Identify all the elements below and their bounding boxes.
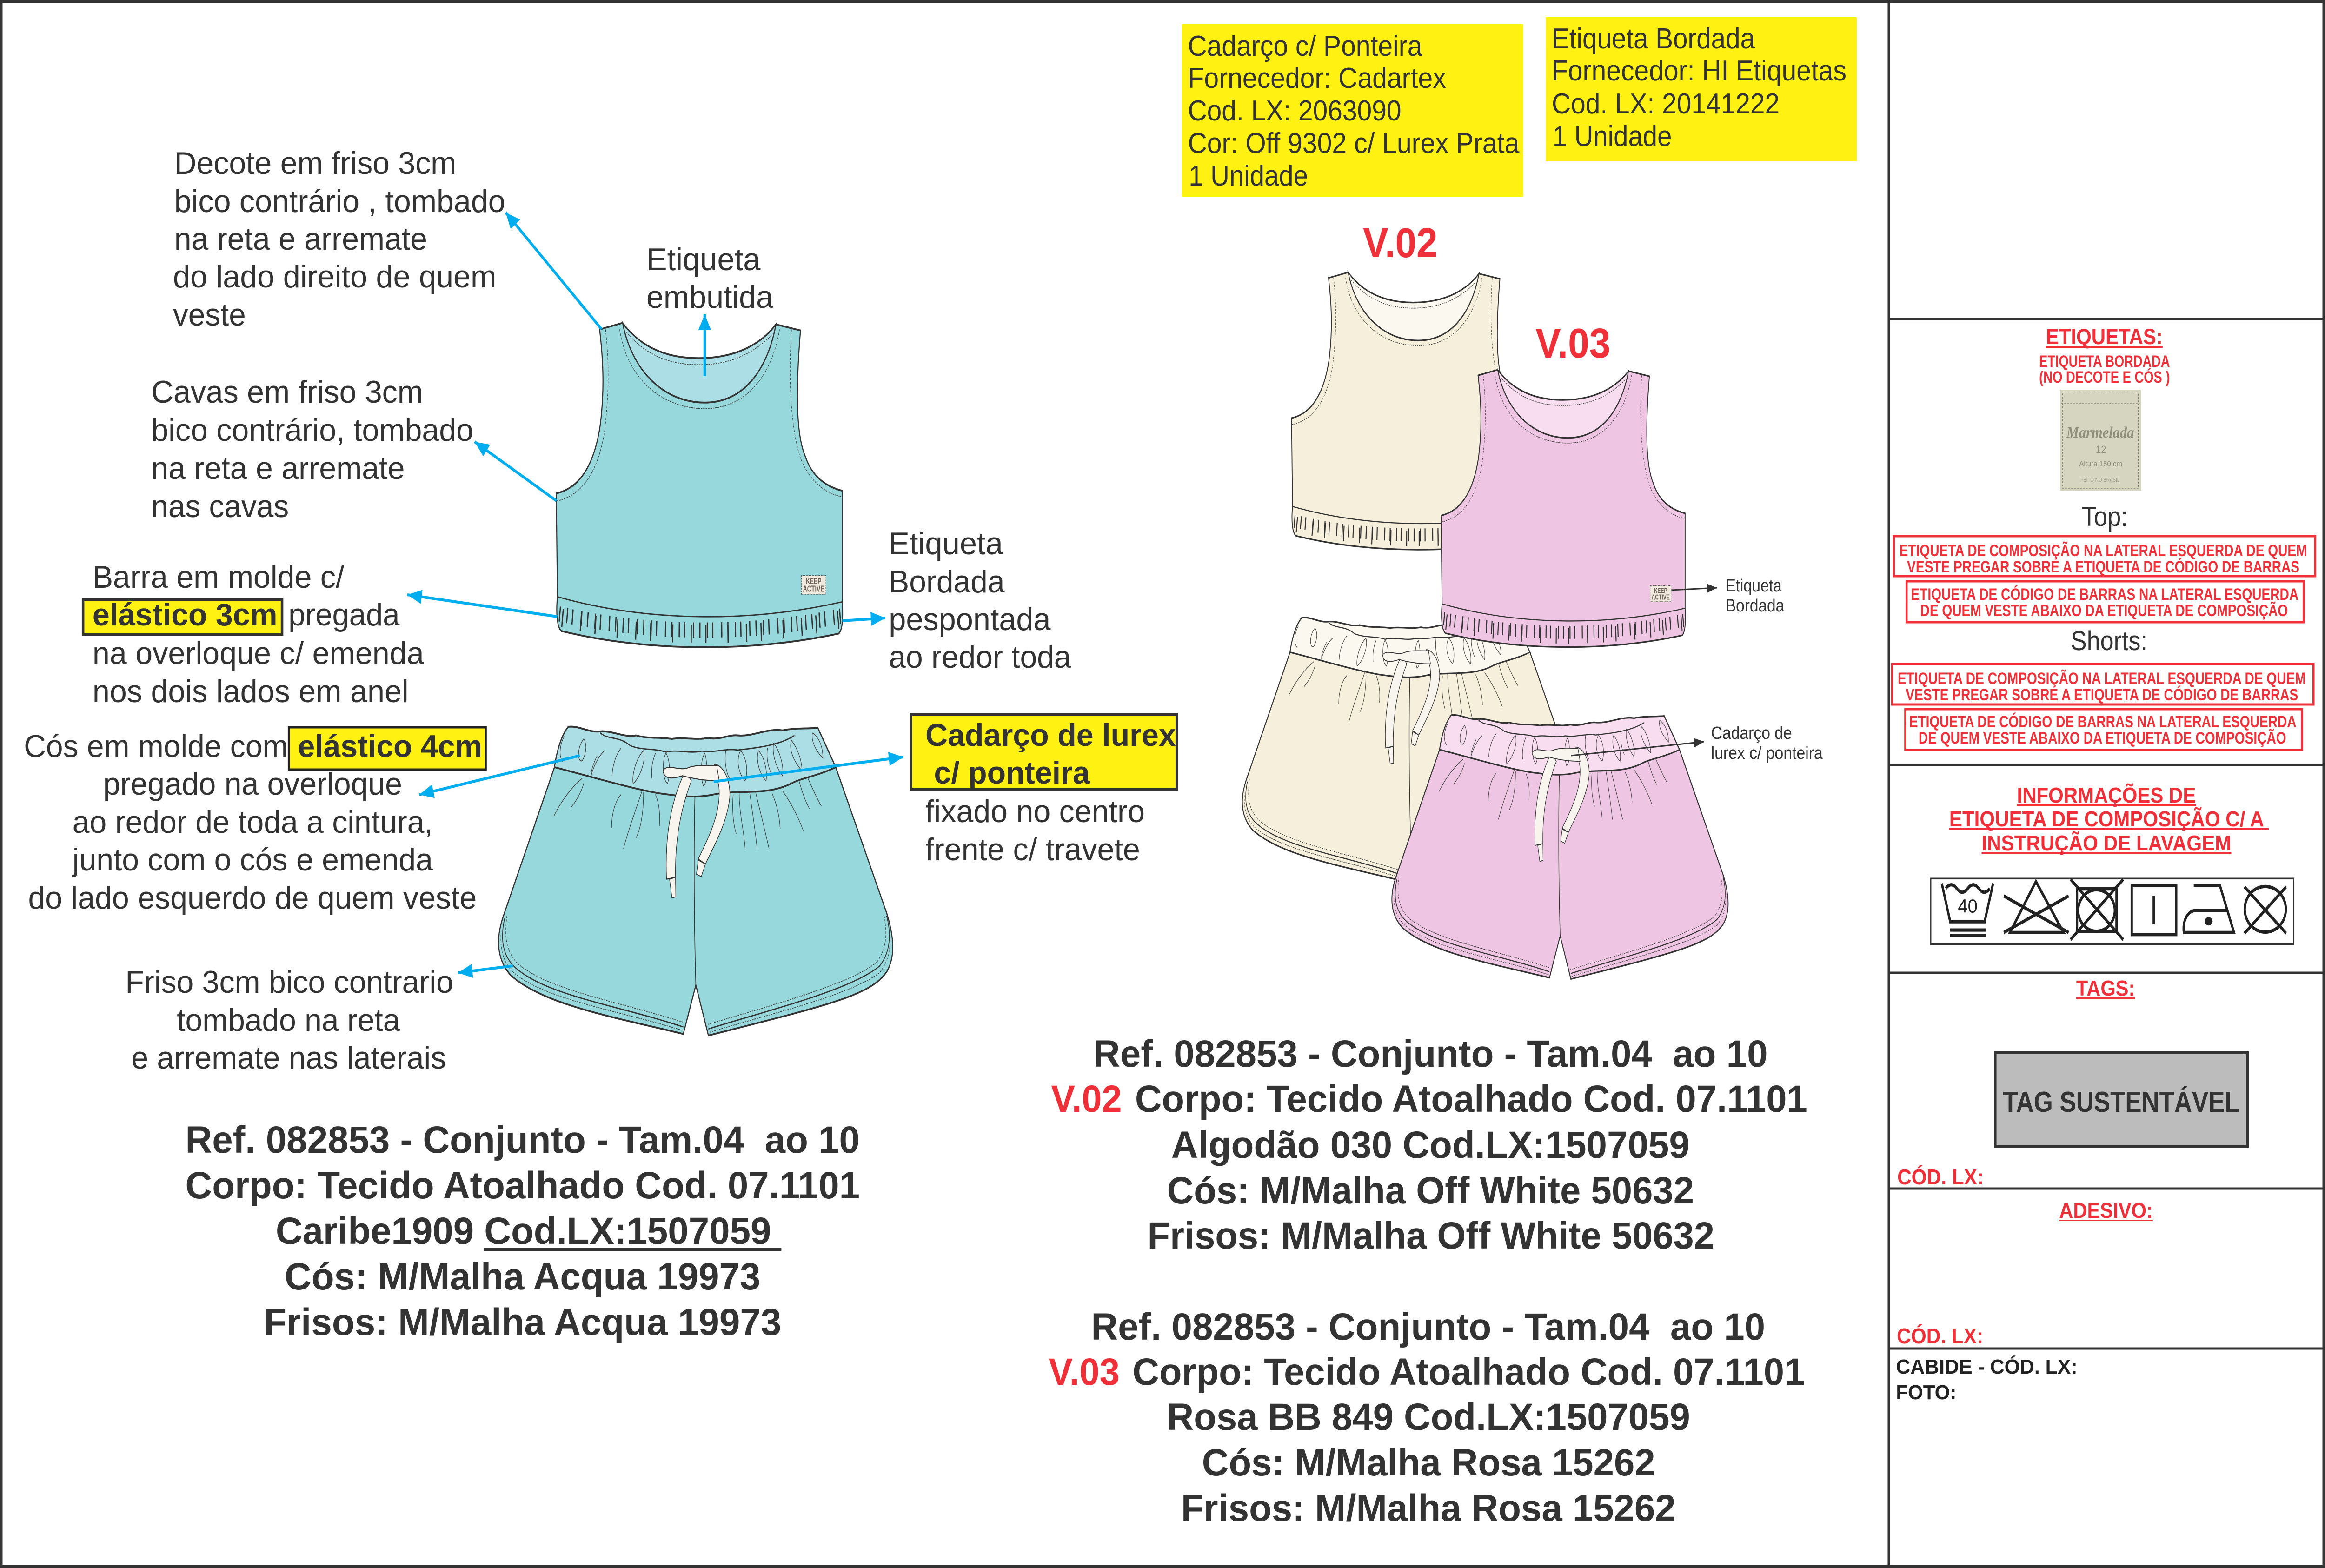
text: barra [83, 559, 424, 709]
text: cós: do lado esquerdo de quem veste [28, 880, 477, 916]
callout: cadarço supplier: 1 Unidade [1189, 159, 1308, 192]
heading: etiquetas: ETIQUETAS: [2046, 324, 2163, 349]
garment: teal top [556, 323, 843, 647]
text: friso [125, 964, 453, 1076]
text: cós: junto com o cós e emenda [72, 842, 433, 877]
text: etiqueta bordada: (NO DECOTE E CÓS ) [2039, 368, 2170, 386]
heading: V.02: V.02 [1363, 220, 1437, 266]
arrows: blue callout pointers [407, 213, 903, 973]
callout: etiqueta supplier: Fornecedor: HI Etiquetas [1552, 54, 1847, 87]
callout: cadarço supplier: Fornecedor: Cadartex [1188, 62, 1446, 94]
garment: pink top [1441, 370, 1685, 647]
panel: cabide e foto: CABIDE - CÓD. LX: [1896, 1355, 2078, 1378]
text block: main reference: Caribe1909 Cod.LX:1507059 [276, 1209, 771, 1252]
text: barra: na overloque c/ emenda [93, 635, 424, 671]
icon: Marmelada woven label: 12 [2096, 444, 2106, 455]
text: friso: tombado na reta [177, 1002, 400, 1038]
text block: V.03 reference: Ref. 082853 - Conjunto - Tam.04 ao 10 [1091, 1305, 1765, 1348]
garment: teal shorts [498, 727, 893, 1036]
text: cós: Cós em molde com [24, 728, 288, 764]
heading: informações: INFORMAÇÕES DE [2017, 783, 2196, 807]
garment: cream shorts [1242, 618, 1579, 882]
callout: etiqueta bordada pink [1671, 576, 1785, 615]
tag sustentável box [1995, 1053, 2247, 1146]
callout: etiqueta bordada pink: Bordada [1726, 596, 1785, 615]
callout: etiqueta supplier: 1 Unidade [1553, 120, 1672, 153]
text: etiqueta bordada pespontada: Bordada [889, 564, 1005, 599]
text: etiqueta bordada pespontada [889, 525, 1071, 675]
text: etiqueta bordada pespontada: ao redor toda [889, 639, 1071, 675]
text: cadarço de lurex: frente c/ travete [925, 831, 1140, 867]
callout: cadarço pink: lurex c/ ponteira [1711, 743, 1823, 763]
heading: shorts: Shorts: [2071, 626, 2147, 656]
text block: V.03 reference [1049, 1305, 1805, 1529]
heading: V.03: V.03 [1535, 320, 1610, 367]
text: etiqueta bordada pespontada: pespontada [889, 601, 1051, 637]
callout: etiqueta supplier [1546, 17, 1857, 161]
text: barra: nos dois lados em anel [93, 673, 409, 709]
text: decote [173, 145, 505, 332]
heading: top: Top: [2082, 502, 2128, 532]
callout: código de barras top [1906, 581, 2304, 622]
text block: V.03 reference: Frisos: M/Malha Rosa 15262 [1181, 1487, 1676, 1529]
text: barra: pregada [288, 597, 400, 632]
heading: informações: INSTRUÇÃO DE LAVAGEM [1981, 831, 2231, 855]
text: código adesivo: CÓD. LX: [1897, 1324, 1983, 1348]
text: cós [24, 727, 486, 916]
icon: Marmelada woven label: Marmelada [2066, 424, 2134, 441]
text: etiqueta embutida [646, 241, 774, 315]
text: friso: e arremate nas laterais [131, 1040, 446, 1076]
heading: tags: TAGS: [2076, 977, 2135, 1000]
panel: cabide e foto: FOTO: [1896, 1381, 1956, 1403]
panel: right-hand specification column [1889, 0, 2325, 1568]
icon: care symbols strip [1931, 878, 2294, 944]
text: cavas: bico contrário, tombado [151, 412, 473, 448]
callout: etiqueta supplier: Etiqueta Bordada [1552, 22, 1755, 55]
illustration: V.02 cream set [1242, 272, 1579, 882]
panel: adesivo [1897, 1199, 2153, 1348]
text: decote: Decote em friso 3cm [174, 145, 456, 181]
icon: Marmelada woven label: Altura 150 cm [2079, 459, 2122, 468]
text: decote: na reta e arremate [174, 221, 427, 257]
text block: V.02 reference: Algodão 030 Cod.LX:1507059 [1171, 1123, 1690, 1166]
callout: etiqueta bordada pink: Etiqueta [1726, 576, 1782, 595]
callout: cadarço supplier: Cadarço c/ Ponteira [1188, 30, 1422, 62]
text: cadarço de lurex: c/ ponteira [934, 755, 1090, 791]
heading: informações [1949, 783, 2269, 855]
callout: cadarço supplier [1182, 24, 1523, 197]
text: cós: pregado na overloque [103, 766, 402, 802]
text: cavas: na reta e arremate [151, 450, 405, 486]
text block: V.02 reference: V.02 [1051, 1077, 1122, 1120]
text block: V.03 reference: V.03 [1049, 1350, 1120, 1393]
text: código tag: CÓD. LX: [1897, 1165, 1984, 1189]
text: barra: Barra em molde c/ [93, 559, 345, 595]
icon: Marmelada woven label [2060, 390, 2141, 491]
text block: main reference: Frisos: M/Malha Acqua 19973 [264, 1301, 781, 1343]
text block: main reference [186, 1118, 860, 1343]
text: cós: ao redor de toda a cintura, [73, 804, 433, 840]
callout: cadarço pink: Cadarço de [1711, 723, 1792, 743]
garment: pink shorts [1392, 715, 1728, 979]
text: etiqueta bordada [2039, 353, 2170, 386]
text: friso: Friso 3cm bico contrario [125, 964, 453, 1000]
callout: composição top [1894, 536, 2315, 576]
illustration: V.03 pink set [1392, 370, 1728, 979]
text: etiqueta embutida: Etiqueta [646, 241, 761, 277]
garment: cream top [1291, 272, 1536, 550]
text: cós: elástico 4cm [298, 728, 482, 764]
callout: cadarço supplier: Cod. LX: 2063090 [1188, 94, 1402, 127]
text: decote: do lado direito de quem [173, 259, 496, 294]
text: cadarço de lurex [911, 714, 1177, 867]
text: cavas [151, 374, 473, 524]
text: etiqueta bordada pespontada: Etiqueta [889, 525, 1003, 561]
text: decote: bico contrário , tombado [174, 183, 505, 219]
text: decote: veste [173, 297, 246, 332]
text block: V.03 reference: Cós: M/Malha Rosa 15262 [1202, 1441, 1655, 1484]
text block: main reference: Ref. 082853 - Conjunto - Tam.04 ao 10 [186, 1118, 860, 1161]
panel: tags [1897, 977, 2247, 1189]
text block: V.03 reference: Corpo: Tecido Atoalhado Cod. 07.1101 [1132, 1350, 1805, 1393]
tag sustentável box: TAG SUSTENTÁVEL [2003, 1086, 2240, 1118]
text block: V.03 reference: Rosa BB 849 Cod.LX:1507059 [1167, 1395, 1690, 1438]
illustration: main teal set [498, 323, 893, 1036]
text block: main reference: Cós: M/Malha Acqua 19973 [285, 1255, 761, 1298]
text: cavas: Cavas em friso 3cm [151, 374, 423, 410]
text: etiqueta bordada: ETIQUETA BORDADA [2039, 353, 2170, 371]
panel: informações de lavagem [1931, 783, 2294, 944]
callout: cadarço supplier: Cor: Off 9302 c/ Lurex Prata [1188, 127, 1520, 159]
text: etiqueta embutida: embutida [646, 279, 774, 315]
text: cavas: nas cavas [151, 488, 289, 524]
text block: V.02 reference: Frisos: M/Malha Off White 50632 [1147, 1214, 1714, 1257]
callout: código de barras shorts [1905, 709, 2302, 750]
text block: main reference: Corpo: Tecido Atoalhado Cod. 07.1101 [186, 1164, 860, 1207]
text block: V.02 reference: Corpo: Tecido Atoalhado Cod. 07.1101 [1135, 1077, 1807, 1120]
icon: care symbols strip: 40 [1958, 896, 1978, 917]
panel: cabide e foto [1896, 1355, 2078, 1403]
callout: cadarço pink [1571, 723, 1823, 763]
text block: V.02 reference: Cós: M/Malha Off White 50632 [1167, 1169, 1694, 1212]
text: cadarço de lurex: Cadarço de lurex [925, 717, 1176, 753]
heading: adesivo: ADESIVO: [2059, 1199, 2153, 1223]
text: cadarço de lurex: fixado no centro [925, 793, 1145, 829]
text: barra: elástico 3cm [93, 597, 277, 632]
text block: V.02 reference [1051, 1032, 1807, 1257]
callout: composição shorts [1892, 664, 2313, 704]
callout: etiqueta supplier: Cod. LX: 20141222 [1552, 87, 1780, 120]
heading: informações: ETIQUETA DE COMPOSIÇÃO C/ A [1949, 807, 2264, 831]
panel: etiquetas [1892, 324, 2315, 750]
text block: V.02 reference: Ref. 082853 - Conjunto - Tam.04 ao 10 [1093, 1032, 1768, 1075]
icon: Marmelada woven label: FEITO NO BRASIL [2080, 477, 2119, 483]
